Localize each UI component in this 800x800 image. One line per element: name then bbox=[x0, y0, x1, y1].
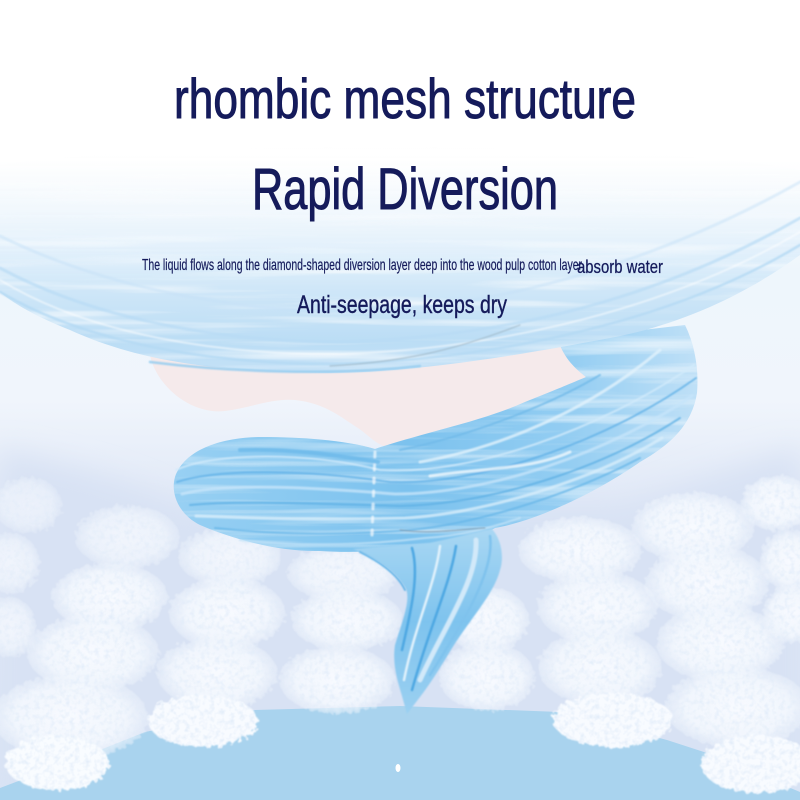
white fibre tufts bbox=[0, 475, 800, 793]
description text: The liquid flows along the diamond-shaped diversion layer deep into the wood pulp cotton layer bbox=[142, 257, 582, 274]
lavender fog behind tufts bbox=[0, 450, 800, 800]
liquid stem funnel bbox=[353, 529, 502, 714]
blue water pool bbox=[0, 706, 800, 800]
heading: Rapid Diversion: Rapid Diversion bbox=[252, 157, 558, 222]
middle liquid swirl bbox=[174, 325, 698, 552]
subheading: anti-seepage: Anti-seepage, keeps dry bbox=[297, 291, 507, 319]
pink underlayer bbox=[150, 330, 600, 448]
title: rhombic mesh structure: rhombic mesh structure bbox=[174, 67, 636, 130]
upper liquid swirl bbox=[0, 147, 800, 373]
water droplet bbox=[396, 764, 400, 772]
label: absorb water: absorb water bbox=[577, 257, 663, 277]
